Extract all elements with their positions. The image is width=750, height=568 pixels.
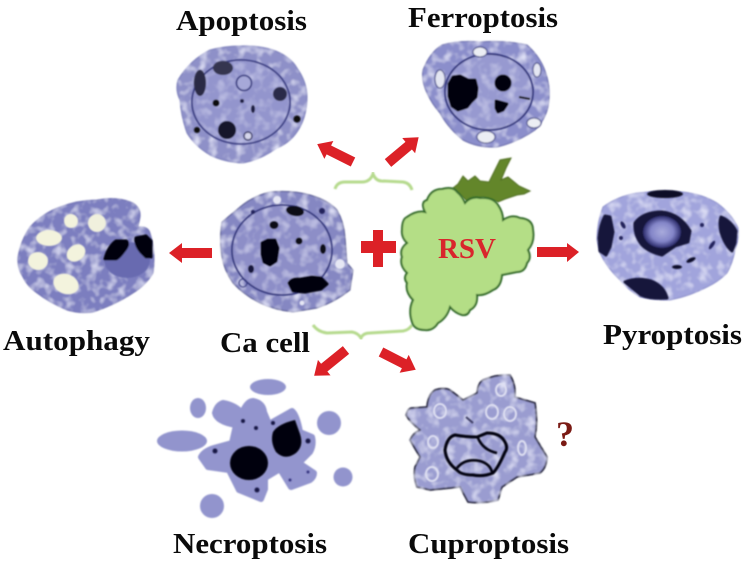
arrow: to cuproptosis: [376, 343, 420, 379]
label: Ca cell: Ca cell: [220, 327, 310, 359]
cell: pyroptosis: [597, 190, 738, 300]
label: Pyroptosis: Pyroptosis: [603, 319, 742, 351]
plus sign: [361, 230, 396, 267]
label: Necroptosis: Necroptosis: [173, 528, 327, 560]
arrow: to autophagy: [169, 243, 212, 263]
arrow: to necroptosis: [308, 342, 352, 384]
cell: cuproptosis: [406, 375, 547, 503]
label: Apoptosis: Apoptosis: [176, 5, 307, 37]
label: Ferroptosis: Ferroptosis: [408, 2, 558, 34]
brace: upper green bracket: [335, 174, 412, 190]
grape label: RSV: [438, 233, 496, 265]
cell: apoptosis: [177, 46, 307, 163]
grape body: [401, 188, 533, 330]
cell: autophagy: [18, 199, 154, 313]
cell: Ca cell: [220, 191, 353, 312]
grape stem and leaf: [453, 158, 530, 202]
brace: lower green bracket: [313, 325, 412, 338]
cell: ferroptosis: [422, 41, 549, 147]
cell: necroptosis: [157, 379, 352, 518]
grape: RSV: [401, 158, 533, 330]
question mark: ?: [556, 414, 574, 454]
arrow: to apoptosis: [313, 135, 357, 171]
arrow: to pyroptosis: [537, 243, 579, 262]
necroptosis main body: [201, 401, 314, 499]
label: Cuproptosis: Cuproptosis: [408, 528, 569, 560]
label: Autophagy: Autophagy: [3, 325, 151, 357]
arrow: to ferroptosis: [382, 130, 425, 171]
necroptosis fragments: [157, 379, 352, 518]
